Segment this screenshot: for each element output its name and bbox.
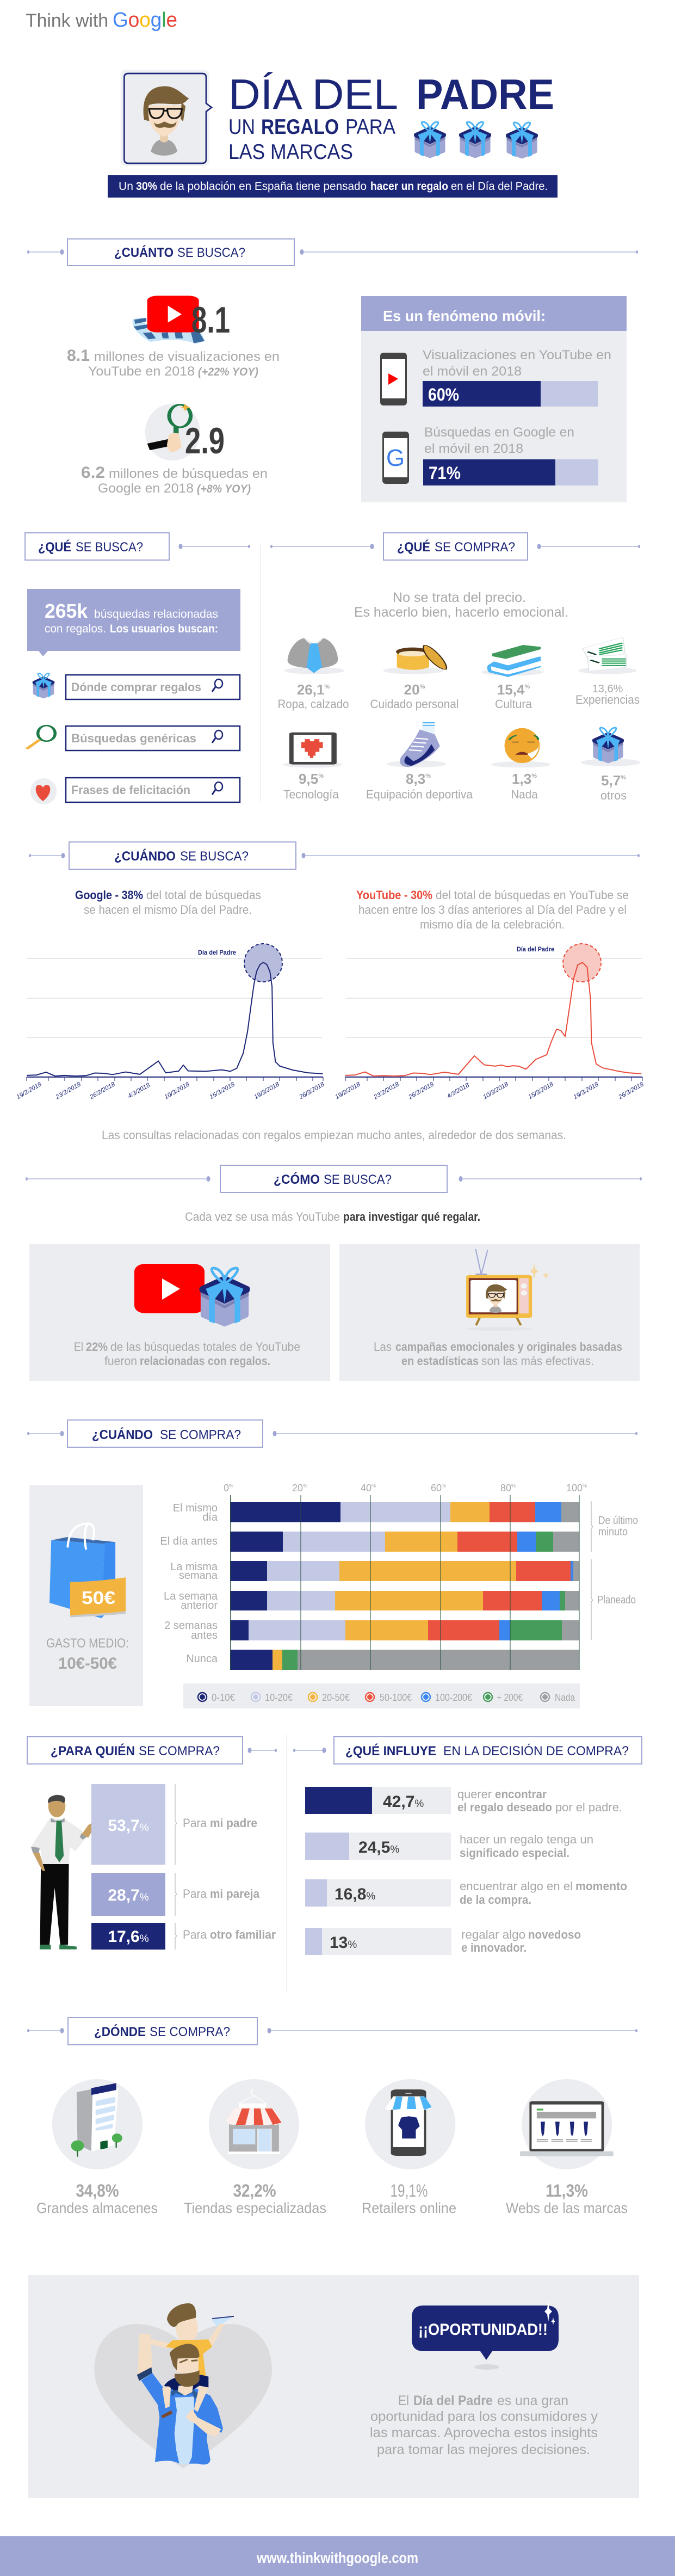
line chart: YouTube [334, 944, 645, 1101]
heading: qué influye: EN LA DECISIÓN DE COMPRA? [443, 1744, 629, 1759]
brace: planeado [591, 1559, 636, 1640]
heading: qué se busca: SE BUSCA? [76, 540, 143, 555]
brace: de último minuto: De último [598, 1515, 638, 1527]
icon: plane tickets [578, 637, 636, 674]
influence item 13%: novedoso [528, 1928, 581, 1941]
brace: de último minuto [591, 1501, 638, 1552]
icon: store [209, 2079, 299, 2169]
panel text [74, 1340, 300, 1368]
heading: dónde se compra: ¿DÓNDE [94, 2024, 146, 2039]
panel text: Las [374, 1340, 392, 1354]
bar: el mismo día [173, 1502, 579, 1523]
text: Google mobile: Búsquedas en Google en [424, 425, 574, 440]
banner: 30% [136, 180, 157, 193]
bar: 2 semanas antes [164, 1620, 579, 1641]
bar 60% [423, 381, 598, 407]
influence item 42,7%: el regalo deseado [457, 1800, 552, 1814]
stats row 2: % [318, 773, 324, 779]
stat: webs de las marcas: Webs de las marcas [506, 2200, 628, 2216]
title: LAS MARCAS [228, 140, 353, 164]
influence item 42,7%: por el padre. [555, 1800, 622, 1814]
panel text: El [74, 1340, 83, 1354]
text: Google searches: 6.2 [81, 464, 105, 482]
text: YouTube views: (+22% YOY) [198, 366, 258, 378]
stats row 1: 13,6% [592, 683, 623, 695]
influence item 16,8%: 16,8% [335, 1885, 375, 1903]
stats row 2: Equipación deportiva [366, 788, 473, 801]
icon: phone YouTube [380, 353, 407, 405]
line chart: YouTube: 23/2/2018 [372, 1081, 400, 1101]
icon: gift small [33, 673, 54, 698]
panel text: de las búsquedas totales de YouTube [110, 1340, 300, 1354]
axis labels: % [583, 1483, 587, 1489]
heading: cuánto se busca [27, 239, 638, 266]
stat number 8.1: 8.1 [191, 299, 230, 341]
line chart: YouTube: 19/2/2018 [334, 1081, 362, 1101]
text: cada vez: Cada vez se usa más YouTube [185, 1210, 340, 1224]
title: REGALO [261, 115, 339, 139]
axis labels [224, 1483, 587, 1493]
line chart: Google: 4/3/2018 [127, 1082, 151, 1100]
speech bubble: oportunidad: ¡¡OPORTUNIDAD!! [418, 2321, 548, 2339]
title: UN [228, 115, 255, 139]
icon: gift otros [581, 728, 641, 766]
heading: cuándo se compra [27, 1420, 637, 1447]
stats row 1: 20 [404, 681, 420, 698]
bar: la semana anterior: anterior [181, 1600, 218, 1612]
title: DÍA DEL [228, 70, 398, 118]
icon: YouTube with scarf [133, 296, 205, 344]
icon: heart bubble [30, 778, 57, 804]
heading: dónde se compra: SE COMPRA? [150, 2025, 230, 2039]
stats row 1: % [524, 684, 530, 690]
stats row 2: Tecnología [283, 788, 339, 801]
search box 1 [66, 675, 240, 699]
text: YouTube 30%: mismo día de la celebración. [420, 918, 565, 931]
heading: qué influye: ¿QUÉ INFLUYE [345, 1743, 436, 1759]
axis labels: 0 [224, 1483, 229, 1493]
stats row 1: % [420, 684, 425, 690]
influence item 16,8% [305, 1879, 627, 1907]
heading: cuándo se busca: ¿CUÁNDO [114, 849, 176, 864]
line chart: YouTube: 10/3/2018 [482, 1081, 510, 1101]
axis labels: 100 [566, 1483, 583, 1493]
heading: qué se busca [25, 533, 250, 560]
bar: el día antes: El día antes [160, 1535, 218, 1547]
text: Google searches: Google en 2018 [98, 481, 194, 496]
bar: la misma semana: semana [179, 1570, 218, 1582]
text: YouTube 30%: hacen entre los 3 días anteriores al Día del Padre y el [358, 903, 627, 917]
influence item 16,8%: de la compra. [460, 1893, 531, 1907]
search box 3 [66, 778, 240, 802]
icon: phone Google: G [386, 445, 405, 471]
icon: phone Google [382, 432, 409, 484]
search box 3: Frases de felicitación [71, 783, 190, 797]
stats row 1: Ropa, calzado [277, 697, 349, 711]
labels: para quién: Para [183, 1887, 207, 1901]
text: YouTube mobile: el móvil en 2018 [423, 364, 522, 379]
influence item 24,5%: hacer un regalo tenga un [460, 1833, 593, 1846]
line chart: YouTube: 4/3/2018 [446, 1082, 470, 1100]
stats row 1: 26,1 [297, 681, 324, 698]
text: consultas: Las consultas relacionadas con regalos empiezan mucho antes, alrededor de dos semanas. [102, 1128, 566, 1142]
influence item 24,5% [305, 1833, 593, 1860]
stat: retailers online: Retailers online [362, 2200, 456, 2216]
bar: el día antes [160, 1532, 579, 1552]
text: no se trata del precio: Es hacerlo bien, hacerlo emocional. [354, 605, 568, 620]
labels: para quién: Para [183, 1928, 207, 1941]
icon: three gifts [414, 122, 538, 159]
bar: la misma semana: La misma [170, 1561, 218, 1573]
bar: la misma semana [170, 1561, 579, 1582]
title: PARA [345, 115, 395, 139]
text: cada vez: para investigar qué regalar. [343, 1210, 480, 1224]
bar 71% [423, 459, 598, 485]
influence item 42,7%: encontrar [495, 1787, 547, 1801]
banner [108, 175, 558, 198]
text: YouTube mobile: Visualizaciones en YouTube en [423, 348, 611, 362]
stat: grandes almacenes: Grandes almacenes [36, 2200, 158, 2216]
bar: pareja [91, 1873, 165, 1916]
icon: jar [383, 645, 447, 674]
stats row 1: Cultura [495, 697, 532, 711]
line chart: Google: 15/3/2018 [208, 1081, 236, 1101]
labels: para quién: otro familiar [210, 1928, 276, 1941]
stacked bar chart [160, 1483, 638, 1670]
bar: padre [91, 1784, 165, 1865]
labels: para quién [183, 1816, 276, 1941]
heading: cómo se busca: ¿CÓMO [274, 1172, 320, 1187]
stats row 2: % [621, 774, 626, 781]
panel: oportunidad [28, 2275, 639, 2498]
stats row 2: Nada [511, 788, 538, 801]
legend: 20-50€ [322, 1692, 350, 1703]
heading: dónde se compra [27, 2018, 637, 2045]
panel: YouTube gift [29, 1244, 330, 1381]
heading: cuándo se compra: ¿CUÁNDO [92, 1427, 153, 1442]
text: Google searches [81, 464, 268, 496]
influence item 42,7% [305, 1787, 622, 1814]
legend: 0-10€ [212, 1692, 235, 1703]
legend [183, 1683, 580, 1708]
heading: qué se compra: ¿QUÉ [397, 539, 430, 555]
heading: cuánto se busca: ¿CUÁNTO [114, 245, 174, 260]
line chart: Google: 26/3/2018 [298, 1081, 326, 1101]
footer: www.thinkwithgoogle.com [256, 2549, 418, 2566]
text: Google 38%: se hacen el mismo Día del Padre. [84, 903, 252, 917]
legend: + 200€ [497, 1692, 523, 1703]
axis labels: 80 [500, 1483, 511, 1493]
influence item 16,8%: momento [575, 1879, 627, 1893]
line chart: Google: 19/3/2018 [253, 1081, 281, 1101]
title [228, 70, 554, 164]
bar: padre: 53,7% [108, 1817, 149, 1835]
brace: de último minuto: minuto [598, 1526, 628, 1538]
panel title: Es un fenómeno móvil: [383, 308, 546, 324]
speech bubble: oportunidad [412, 2301, 559, 2370]
icon: laptop web [520, 2079, 614, 2169]
callout: 265k: 265k [45, 600, 88, 622]
banner: Un [119, 180, 133, 193]
header avatar card [121, 70, 212, 166]
stats row 1: Cuidado personal [370, 697, 459, 711]
stats row 1 [277, 681, 640, 711]
bar 60%: 60% [428, 385, 459, 404]
bar: otro familiar [91, 1923, 165, 1950]
panel text: campañas emocionales y originales basadas [395, 1340, 622, 1354]
text: YouTube mobile [423, 348, 611, 379]
heading: qué se compra: SE COMPRA? [435, 540, 515, 555]
logo: Think with Google [26, 9, 177, 32]
text: Google searches: (+8% YOY) [197, 483, 251, 495]
panel text: relacionadas con regalos. [140, 1354, 270, 1368]
line chart: YouTube: 15/3/2018 [527, 1081, 555, 1101]
brace: planeado: Planeado [597, 1594, 636, 1606]
heading: cuándo se busca: SE BUSCA? [180, 849, 249, 864]
text: YouTube 30% [356, 888, 629, 931]
heading: para quién se compra: ¿PARA QUIÉN [51, 1743, 135, 1759]
gasto value: 10€-50€ [58, 1655, 117, 1673]
icon: books [481, 645, 543, 677]
text: closing message [370, 2393, 598, 2457]
bar: el mismo día: El mismo [173, 1502, 218, 1514]
stat number 2.9: 2.9 [185, 420, 225, 462]
stats row 2: 5,7 [601, 772, 621, 789]
stat: retailers online [362, 2181, 456, 2216]
footer [0, 2536, 675, 2576]
legend: 100-200€ [435, 1692, 472, 1703]
axis labels: % [303, 1483, 307, 1489]
heading: cuánto se busca: SE BUSCA? [177, 245, 245, 260]
banner: en el Día del Padre. [451, 180, 548, 193]
icon: department store [52, 2079, 143, 2169]
labels: para quién: mi padre [210, 1816, 257, 1830]
legend: 10-20€ [265, 1692, 293, 1703]
bars: para quién [91, 1784, 177, 1950]
influence item 13%: regalar algo [461, 1928, 525, 1941]
stat: tiendas especializadas: Tiendas especializadas [184, 2200, 326, 2216]
bar: pareja: 28,7% [108, 1886, 149, 1904]
influence item 13% [305, 1928, 581, 1955]
influence item 42,7%: 42,7% [383, 1793, 424, 1811]
label día del padre: Día del Padre [198, 949, 236, 956]
gasto label: GASTO MEDIO: [46, 1636, 129, 1651]
line chart: Google: 19/2/2018 [15, 1081, 43, 1101]
icon: tablet heart [283, 733, 342, 768]
stat: webs de las marcas [506, 2181, 628, 2216]
stats row 1: % [324, 684, 330, 690]
heading: para quién se compra [27, 1737, 277, 1764]
influence item 24,5%: 24,5% [358, 1839, 399, 1856]
bar: nunca: Nunca [186, 1653, 218, 1665]
panel text: en estadísticas [401, 1354, 479, 1368]
text: YouTube views: millones de visualizaciones en [94, 349, 280, 364]
panel: gasto medio [29, 1485, 143, 1706]
stats row 2 [283, 771, 627, 802]
icon: YouTube logo and gift [134, 1264, 250, 1326]
icon: shopping bag with price tag [49, 1523, 126, 1618]
panel text: son las más efectivas. [481, 1354, 594, 1368]
stat: tiendas especializadas [184, 2181, 326, 2216]
stats row 1: 15,4 [497, 681, 524, 698]
heading: qué se busca: ¿QUÉ [38, 539, 71, 555]
bar: la semana anterior [164, 1590, 579, 1612]
labels: para quién: Para [183, 1816, 207, 1830]
search box 2 [66, 726, 240, 751]
illustration: father and child [94, 2303, 272, 2468]
stat: grandes almacenes [36, 2181, 158, 2216]
panel text: fueron [104, 1354, 137, 1368]
callout: 265k [27, 589, 240, 656]
stats row 2: otros [600, 789, 627, 802]
text: YouTube views: YouTube en 2018 [88, 364, 195, 379]
stats row 2: % [425, 773, 431, 779]
heading: qué se compra [270, 533, 640, 560]
influence item 16,8%: encuentrar algo en el [460, 1879, 573, 1893]
text: closing message: El [398, 2393, 409, 2408]
stats row 1: Experiencias [575, 693, 640, 706]
heading: cómo se busca: SE BUSCA? [324, 1172, 392, 1187]
influence item 42,7%: querer [457, 1787, 492, 1801]
stat: webs de las marcas: 11,3% [546, 2181, 588, 2200]
text: no se trata del precio: No se trata del precio. [393, 590, 526, 605]
callout: 265k: Los usuarios buscan: [110, 623, 218, 635]
stats row 2: 1,3 [512, 771, 531, 787]
axis labels: % [371, 1483, 376, 1489]
line chart: YouTube: 26/2/2018 [407, 1081, 435, 1101]
axis labels: % [511, 1483, 516, 1489]
heading: para quién se compra: SE COMPRA? [139, 1744, 220, 1759]
line chart: Google [15, 944, 326, 1101]
heading: cómo se busca [26, 1165, 642, 1192]
bar: nunca [186, 1650, 579, 1670]
axis labels: % [229, 1483, 233, 1489]
bar: 2 semanas antes: 2 semanas [164, 1620, 218, 1632]
heading: cuándo se compra: SE COMPRA? [160, 1428, 241, 1442]
text: YouTube 30%: del total de búsquedas en YouTube se [436, 888, 629, 902]
stat: retailers online: 19,1% [391, 2181, 428, 2200]
text: YouTube views [67, 347, 280, 379]
stats row 2: 9,5 [299, 771, 318, 787]
text: YouTube views: 8.1 [67, 347, 90, 365]
line chart: Google: 23/2/2018 [54, 1081, 82, 1101]
text: closing message: oportunidad para los consumidores y [370, 2409, 598, 2424]
line chart: Google: 10/3/2018 [163, 1081, 191, 1101]
text: closing message: las marcas. Aprovecha estos insights [370, 2425, 598, 2440]
text: Google searches: millones de búsquedas en [109, 466, 268, 481]
label día del padre: Día del Padre [517, 945, 554, 953]
text: YouTube 30%: YouTube - 30% [356, 888, 432, 902]
icon: shirt and tie [284, 637, 344, 674]
price tag label: 50€ [82, 1588, 115, 1608]
heading: cuándo se busca [29, 842, 640, 869]
panel text [374, 1340, 622, 1368]
influence item 13%: e innovador. [461, 1941, 527, 1954]
labels: para quién: mi pareja [210, 1887, 260, 1901]
legend: 50-100€ [380, 1692, 412, 1703]
callout: 265k: con regalos. [45, 623, 106, 635]
line chart: YouTube: 19/3/2018 [572, 1081, 600, 1101]
axis labels: 20 [292, 1483, 303, 1493]
axis labels: % [442, 1483, 446, 1489]
search box 1: Dónde comprar regalos [71, 680, 201, 694]
bar: el mismo día: día [202, 1511, 218, 1523]
text: closing message: es una gran [497, 2393, 568, 2408]
icon: television [466, 1249, 549, 1331]
stat: tiendas especializadas: 32,2% [233, 2181, 276, 2200]
panel text: 22% [86, 1340, 108, 1354]
text: closing message: para tomar las mejores decisiones. [377, 2442, 590, 2457]
heading: qué influye [293, 1737, 642, 1764]
text: no se trata del precio [354, 590, 568, 620]
axis labels: 40 [361, 1483, 371, 1493]
text: Google 38%: Google - 38% [75, 888, 143, 902]
search box 2: Búsquedas genéricas [71, 731, 196, 745]
influence item 24,5%: significado especial. [460, 1846, 569, 1860]
stats row 2: % [531, 773, 537, 779]
banner: de la población en España tiene pensado [160, 180, 367, 193]
legend: Nada [555, 1692, 575, 1703]
line chart: Google: 26/2/2018 [88, 1081, 116, 1101]
bar: la semana anterior: La semana [164, 1590, 218, 1602]
stats row 2: 8,3 [406, 771, 425, 787]
panel: fenómeno móvil [361, 296, 627, 502]
text: Google mobile [424, 425, 574, 456]
icon: crying face [491, 728, 550, 767]
text: closing message: Día del Padre [413, 2393, 493, 2408]
icon: sneaker [387, 722, 447, 767]
line chart: YouTube: 26/3/2018 [617, 1081, 645, 1101]
bar: 2 semanas antes: antes [191, 1630, 218, 1641]
logo: Think with Google: Think with [26, 10, 108, 31]
stat: grandes almacenes: 34,8% [76, 2181, 119, 2200]
text: Google mobile: el móvil en 2018 [424, 441, 523, 456]
text: Google 38%: del total de búsquedas [146, 888, 261, 902]
panel: emotional campaigns [339, 1244, 640, 1381]
text: Google 38% [75, 888, 261, 917]
bar: otro familiar: 17,6% [108, 1928, 149, 1946]
title: PADRE [416, 70, 554, 118]
influence item 13%: 13% [330, 1934, 357, 1952]
icon: magnifier in hand [145, 404, 200, 460]
bar 71%: 71% [429, 463, 461, 483]
icon: online store phone [365, 2079, 455, 2169]
illustration: man pointing [31, 1795, 94, 1950]
text: cada vez [185, 1210, 480, 1224]
callout: 265k: búsquedas relacionadas [94, 608, 218, 620]
banner: hacer un regalo [370, 180, 448, 193]
logo: Think with Google: Google [113, 9, 177, 32]
icon: magnifier small [27, 726, 55, 749]
axis labels: 60 [431, 1483, 442, 1493]
